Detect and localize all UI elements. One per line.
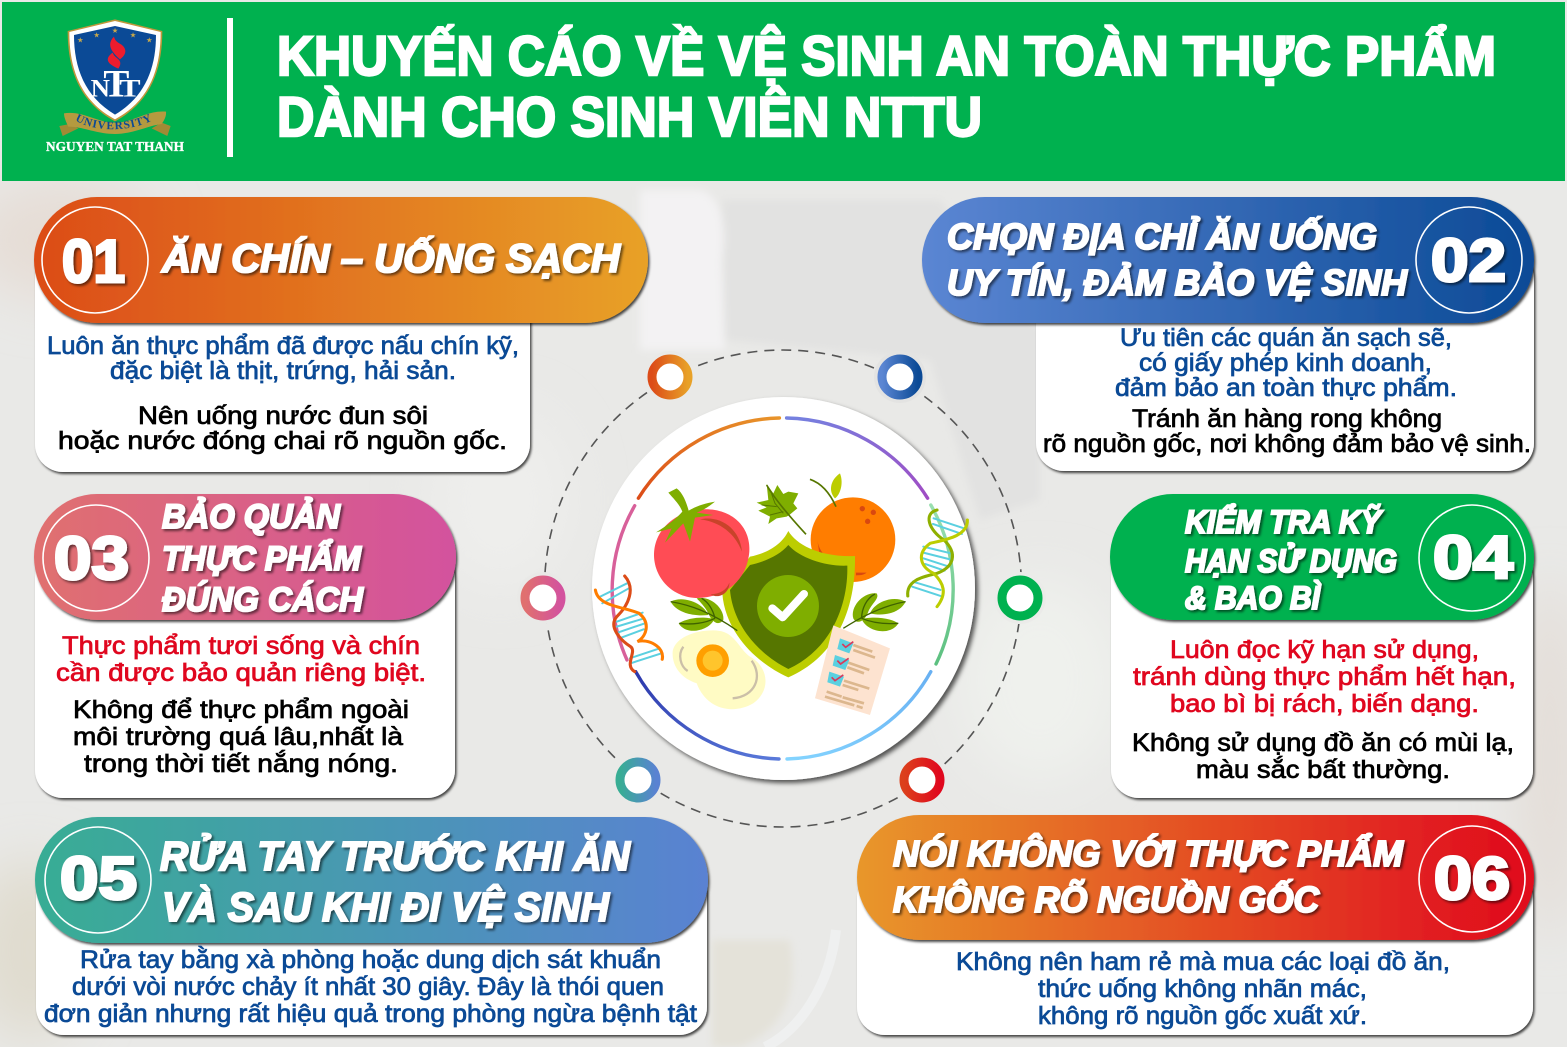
body text 04 — [1132, 636, 1516, 784]
logo: Nguyen Tat Thanh University: ★ — [146, 35, 153, 44]
body text 02 — [1043, 324, 1531, 458]
heading pill 02: UY TÍN, ĐẢM BẢO VỆ SINH — [947, 261, 1408, 303]
heading pill 06: 06 — [1434, 845, 1510, 912]
logo: Nguyen Tat Thanh University: N — [91, 75, 110, 103]
heading pill 04: 04 — [1433, 524, 1514, 591]
logo: Nguyen Tat Thanh University — [46, 19, 184, 154]
body text 03: trong thời tiết nắng nóng. — [84, 749, 398, 778]
panel 05: wash hands — [35, 817, 708, 1035]
heading pill 01: ĂN CHÍN – UỐNG SẠCH — [161, 235, 621, 281]
heading pill 04 — [1110, 494, 1534, 620]
body text 03: Thực phẩm tươi sống và chín — [62, 632, 420, 660]
heading pill 03 — [34, 494, 456, 620]
shield — [722, 531, 855, 677]
body text 06: không rõ nguồn gốc xuất xứ. — [1038, 1002, 1367, 1030]
heading pill 01: 01 — [62, 228, 125, 295]
body text 04: tránh dùng thực phẩm hết hạn, — [1133, 663, 1516, 691]
header band — [2, 2, 1565, 181]
food safety illustration — [654, 473, 906, 715]
connector rings — [517, 351, 1046, 806]
heading pill 02: CHỌN ĐỊA CHỈ ĂN UỐNG — [947, 215, 1377, 257]
heading pill 06: NÓI KHÔNG VỚI THỰC PHẨM — [893, 832, 1404, 874]
fried egg — [673, 630, 766, 709]
body text 01: đặc biệt là thịt, trứng, hải sản. — [110, 357, 456, 385]
body text 03: cần được bảo quản riêng biệt. — [56, 659, 426, 687]
card body 04 — [1111, 550, 1533, 798]
title — [277, 24, 1496, 148]
body text 04: Không sử dụng đồ ăn có mùi lạ, — [1132, 729, 1514, 757]
coloured ring arcs — [612, 418, 953, 759]
central diagram — [517, 350, 1046, 827]
DNA helix right — [908, 510, 967, 607]
heading pill 02 — [922, 197, 1534, 323]
logo: Nguyen Tat Thanh University: T — [119, 75, 141, 103]
logo: Nguyen Tat Thanh University: NGUYEN TAT THANH — [46, 139, 184, 154]
heading pill 05: RỬA TAY TRƯỚC KHI ĂN — [160, 833, 631, 879]
card body 05 — [36, 870, 707, 1035]
body text 06: Không nên ham rẻ mà mua các loại đồ ăn, — [956, 948, 1450, 976]
logo: Nguyen Tat Thanh University: ★ — [77, 35, 84, 44]
logo: Nguyen Tat Thanh University: ★ — [112, 26, 119, 35]
body text 04: bao bì bị rách, biến dạng. — [1170, 690, 1479, 718]
body text 04: màu sắc bất thường. — [1196, 755, 1450, 784]
heading pill 05 — [35, 817, 708, 943]
body text 02: Tránh ăn hàng rong không — [1132, 405, 1442, 433]
heading pill 02: 02 — [1431, 227, 1506, 294]
panel 06: refuse food of unknown origin — [857, 815, 1534, 1035]
logo: Nguyen Tat Thanh University: T — [103, 62, 129, 106]
heading pill 04: HẠN SỬ DỤNG — [1185, 543, 1397, 579]
body text 04: Luôn đọc kỹ hạn sử dụng, — [1170, 636, 1479, 664]
body text 02: có giấy phép kinh doanh, — [1139, 349, 1432, 377]
DNA helix left — [595, 576, 663, 672]
checklist — [815, 625, 890, 715]
heading pill 03: 03 — [54, 525, 129, 592]
white plate — [592, 397, 975, 780]
card body 03 — [35, 550, 455, 798]
body text 02: Ưu tiên các quán ăn sạch sẽ, — [1120, 324, 1452, 352]
body text 01: Luôn ăn thực phẩm đã được nấu chín kỹ, — [47, 332, 519, 360]
heading pill 04: & BAO BÌ — [1185, 580, 1321, 616]
heading pill 05: 05 — [60, 845, 137, 912]
heading pill 01 — [34, 197, 648, 323]
card body 01 — [35, 250, 530, 472]
logo: Nguyen Tat Thanh University: UNIVERSITY — [76, 114, 150, 130]
parsley — [757, 484, 806, 534]
heading pill 06: KHÔNG RÕ NGUỒN GỐC — [893, 878, 1320, 920]
body text 03 — [56, 632, 426, 778]
body text 03: môi trường quá lâu,nhất là — [73, 723, 403, 751]
body text 03: Không để thực phẩm ngoài — [73, 696, 409, 724]
panel 02: choose reputable eateries — [922, 197, 1534, 471]
heading pill 04: KIỂM TRA KỸ — [1185, 504, 1384, 540]
orange — [810, 473, 895, 582]
panel 04: check expiry and packaging — [1110, 494, 1534, 798]
heading pill 03: BẢO QUẢN — [162, 498, 341, 536]
body text 01: Nên uống nước đun sôi — [138, 402, 428, 430]
body text 01 — [47, 332, 519, 455]
heading pill 06 — [857, 815, 1534, 940]
logo: Nguyen Tat Thanh University: ★ — [130, 31, 137, 40]
tomato — [654, 488, 749, 598]
panel 01: eat cooked, drink clean — [34, 197, 648, 472]
heading pill 03: THỰC PHẨM — [162, 540, 362, 578]
body text 02: rõ nguồn gốc, nơi không đảm bảo vệ sinh. — [1043, 430, 1531, 458]
heading pill 03: ĐÚNG CÁCH — [162, 581, 364, 619]
body text 06: thức uống không nhãn mác, — [1038, 975, 1367, 1003]
body text 02: đảm bảo an toàn thực phẩm. — [1115, 374, 1457, 402]
body text 05 — [44, 945, 697, 1028]
leaves — [671, 593, 906, 631]
card body 06 — [857, 870, 1533, 1035]
panel 03: store food properly — [34, 494, 456, 798]
body text 05: dưới vòi nước chảy ít nhất 30 giây. Đây là thói quen — [72, 973, 664, 1001]
heading pill 05: VÀ SAU KHI ĐI VỆ SINH — [162, 884, 610, 930]
card body 02 — [1036, 250, 1534, 471]
title: DÀNH CHO SINH VIÊN NTTU — [277, 85, 982, 148]
body text 05: Rửa tay bằng xà phòng hoặc dung dịch sát khuẩn — [80, 945, 661, 974]
body text 06 — [956, 948, 1450, 1030]
body text 05: đơn giản nhưng rất hiệu quả trong phòng ngừa bệnh tật — [44, 1000, 697, 1028]
logo: Nguyen Tat Thanh University: ★ — [93, 31, 100, 40]
body text 01: hoặc nước đóng chai rõ nguồn gốc. — [58, 427, 507, 455]
